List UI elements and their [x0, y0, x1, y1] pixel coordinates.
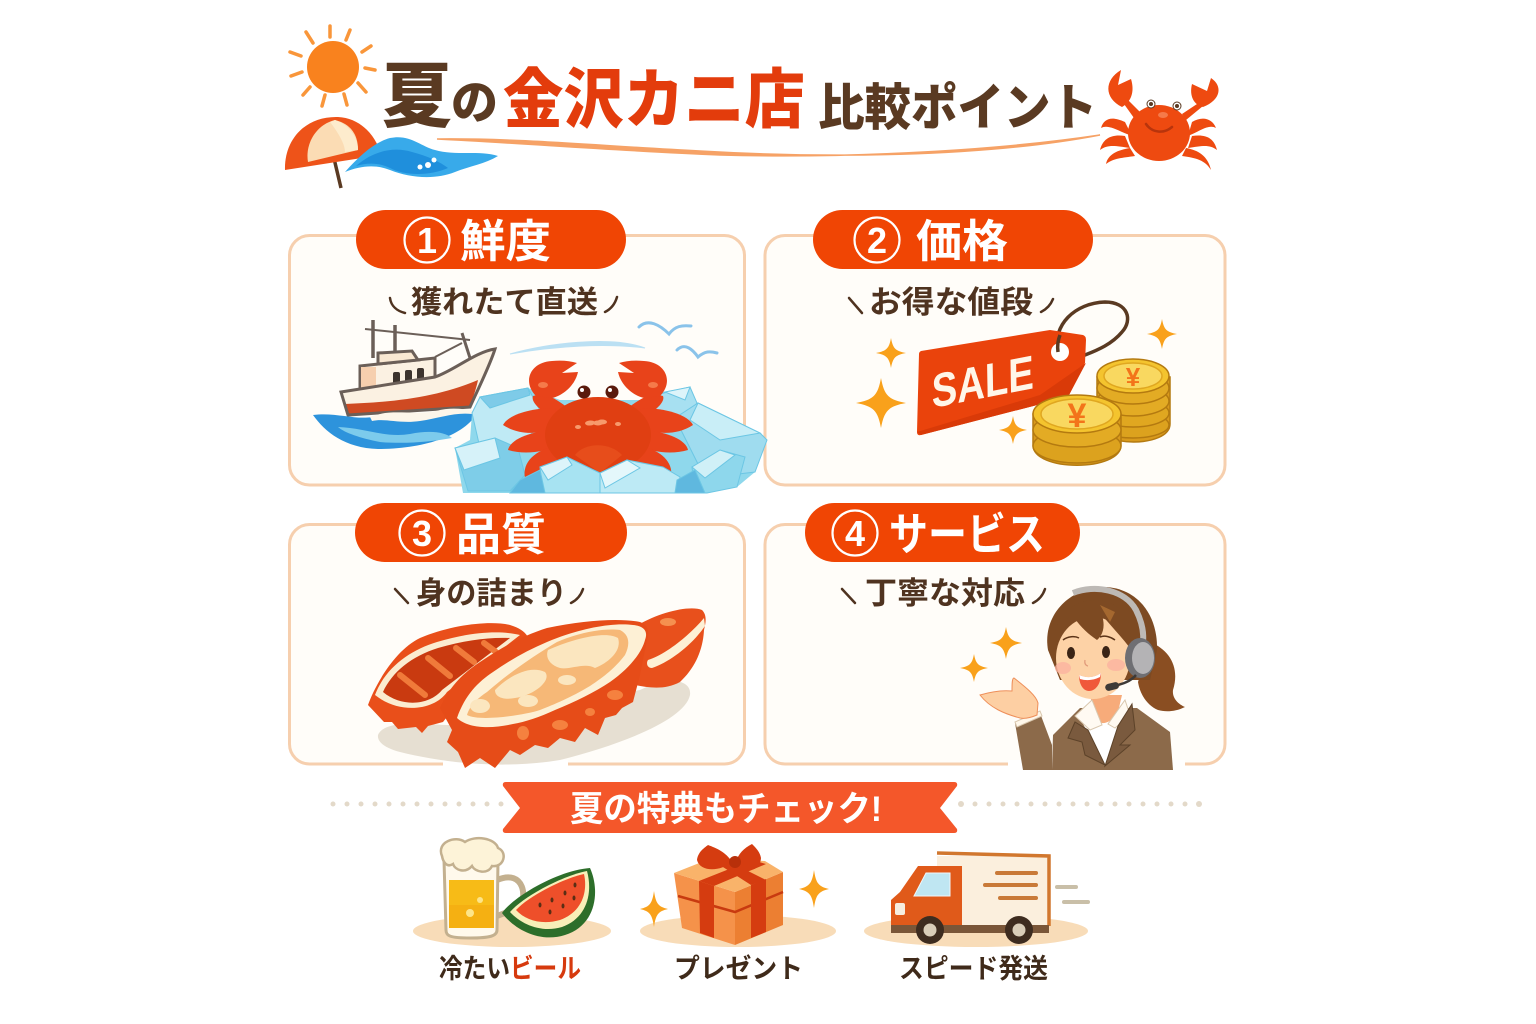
face — [1056, 617, 1130, 699]
illustration: cut crab legs — [368, 608, 706, 768]
arm — [1015, 713, 1052, 770]
beer mug — [441, 838, 523, 938]
subheading: 丁寧な対応: 丁寧な対応 — [865, 576, 1025, 611]
ribbon banner: 夏の特典もチェック!: 夏の特典もチェック! — [570, 790, 882, 829]
crab meat — [467, 630, 628, 718]
facial features — [1067, 647, 1075, 659]
icon: yen coins: ¥ — [1068, 397, 1087, 435]
title text: の: の — [451, 76, 498, 129]
shirt and neck — [1082, 698, 1130, 765]
ice base — [455, 387, 767, 493]
pill heading: ① 鮮度: 鮮度 — [460, 216, 551, 267]
icon: sparkles — [856, 319, 1177, 444]
icon: SALE tag — [917, 302, 1128, 435]
base ellipse — [864, 915, 1088, 947]
base ellipse — [640, 915, 836, 947]
rim — [457, 624, 646, 727]
label: スピード発送: スピード発送 — [899, 954, 1048, 984]
hair back — [1047, 587, 1157, 680]
icon: sun — [290, 26, 375, 106]
illustration: crab on ice — [455, 361, 767, 495]
ice back — [455, 387, 767, 491]
icon: yen coins — [1033, 359, 1170, 465]
icon: sparkles — [960, 627, 1022, 682]
panel: 鮮度 — [290, 210, 744, 485]
icon: header crab — [1100, 70, 1219, 170]
lid band — [678, 892, 783, 912]
panel frame — [765, 236, 1225, 485]
bow — [697, 845, 732, 869]
pill heading: ④ サービス: 4 — [845, 513, 865, 554]
bangs — [1054, 600, 1131, 655]
icon: wave — [345, 137, 498, 177]
subheading: 身の詰まり: 身の詰まり — [416, 576, 567, 611]
panel frame — [765, 524, 1225, 764]
pill heading: ④ サービス — [805, 503, 1080, 562]
icon: yen coins: ¥ — [1126, 362, 1141, 392]
truck — [891, 853, 1088, 944]
ribbons — [699, 881, 714, 938]
title — [285, 26, 1219, 188]
pill heading: ② 価格: 価格 — [916, 216, 1008, 267]
label: 冷たいビール: 冷たいビール — [439, 954, 581, 984]
open hand — [980, 678, 1038, 718]
perk: cold beer and watermelon — [413, 838, 611, 984]
illustration: seagulls — [510, 323, 717, 357]
pill heading: ② 価格 — [813, 210, 1093, 269]
ribbon banner: 夏の特典もチェック! — [503, 782, 957, 833]
base ellipse — [413, 915, 611, 947]
lapels — [1068, 722, 1105, 765]
illustration: fishing boat — [313, 320, 495, 449]
shadow — [378, 681, 690, 765]
shell spots — [517, 690, 623, 740]
title text: 比較ポイント: 比較ポイント — [818, 80, 1097, 136]
headset — [1073, 589, 1143, 642]
pill heading: ③ 品質: 3 — [412, 513, 432, 554]
pill heading: ③ 品質: 品質 — [456, 509, 546, 560]
ponytail — [1138, 642, 1185, 711]
perk: present — [640, 844, 836, 984]
title text: 金沢カニ店: 金沢カニ店 — [503, 63, 805, 136]
white ground under ice — [463, 482, 745, 495]
subheading: お得な値段: お得な値段 — [869, 285, 1033, 320]
panel frame — [290, 236, 744, 485]
jacket — [1052, 708, 1173, 770]
label: プレゼント: プレゼント — [674, 953, 803, 984]
panel frame — [290, 524, 744, 764]
panel: 価格 — [765, 210, 1225, 485]
icon: beach umbrella — [285, 117, 381, 188]
front shell — [440, 620, 648, 768]
panel: 品質 — [290, 503, 744, 768]
icon: sparkles — [640, 870, 829, 927]
pill heading: ② 価格: 2 — [867, 220, 887, 261]
back shell — [368, 623, 528, 733]
divider dots — [330, 801, 1202, 807]
claw — [635, 608, 706, 688]
title text: 夏の: 夏 — [382, 58, 452, 137]
watermelon slice — [502, 868, 595, 937]
pill heading: ③ 品質 — [355, 503, 627, 562]
sea waves — [313, 412, 477, 449]
border gap under operator — [1008, 760, 1185, 768]
panel: サービス — [765, 503, 1225, 770]
title underline swoosh — [437, 135, 1100, 156]
pill heading: ① 鮮度 — [356, 210, 626, 269]
gift box — [674, 844, 783, 945]
perk: speedy delivery — [864, 853, 1088, 984]
crab — [503, 361, 578, 478]
ice front — [510, 450, 745, 493]
border gap under crab legs — [443, 760, 568, 768]
pill heading: ① 鮮度: 1 — [417, 220, 437, 261]
box faces — [674, 873, 735, 945]
illustration: call-center operator — [980, 587, 1185, 770]
icon: SALE tag: SALE — [931, 346, 1034, 419]
pill heading: ④ サービス: サービス — [889, 509, 1045, 560]
subheading: 獲れたて直送: 獲れたて直送 — [411, 285, 598, 320]
